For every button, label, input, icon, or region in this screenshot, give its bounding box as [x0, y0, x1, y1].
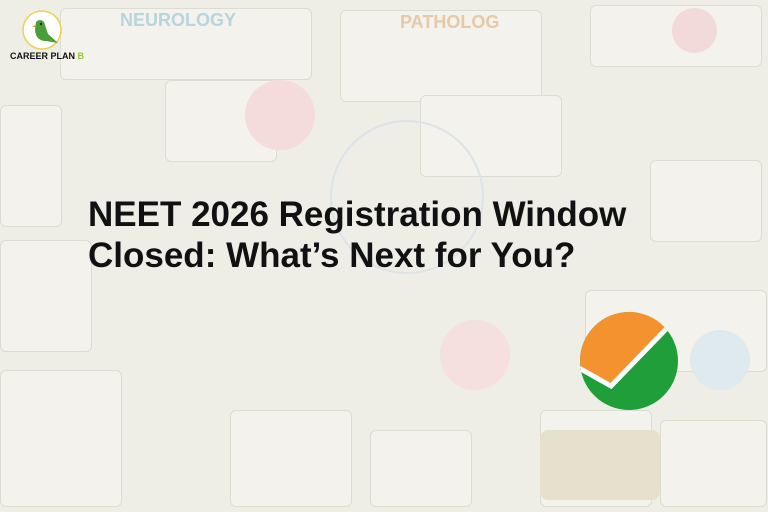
title	[88, 195, 626, 275]
logo: Career Plan B: CAREER PLAN B	[10, 51, 84, 61]
title: Closed: What’s Next for You?	[88, 236, 575, 275]
title: NEET 2026 Registration Window	[88, 195, 626, 234]
logo: Career Plan B	[10, 10, 84, 61]
icon: orange-green check circle	[580, 312, 678, 410]
background: faded infographic: NEUROLOGY	[120, 10, 236, 30]
background: faded infographic: PATHOLOG	[400, 12, 499, 32]
